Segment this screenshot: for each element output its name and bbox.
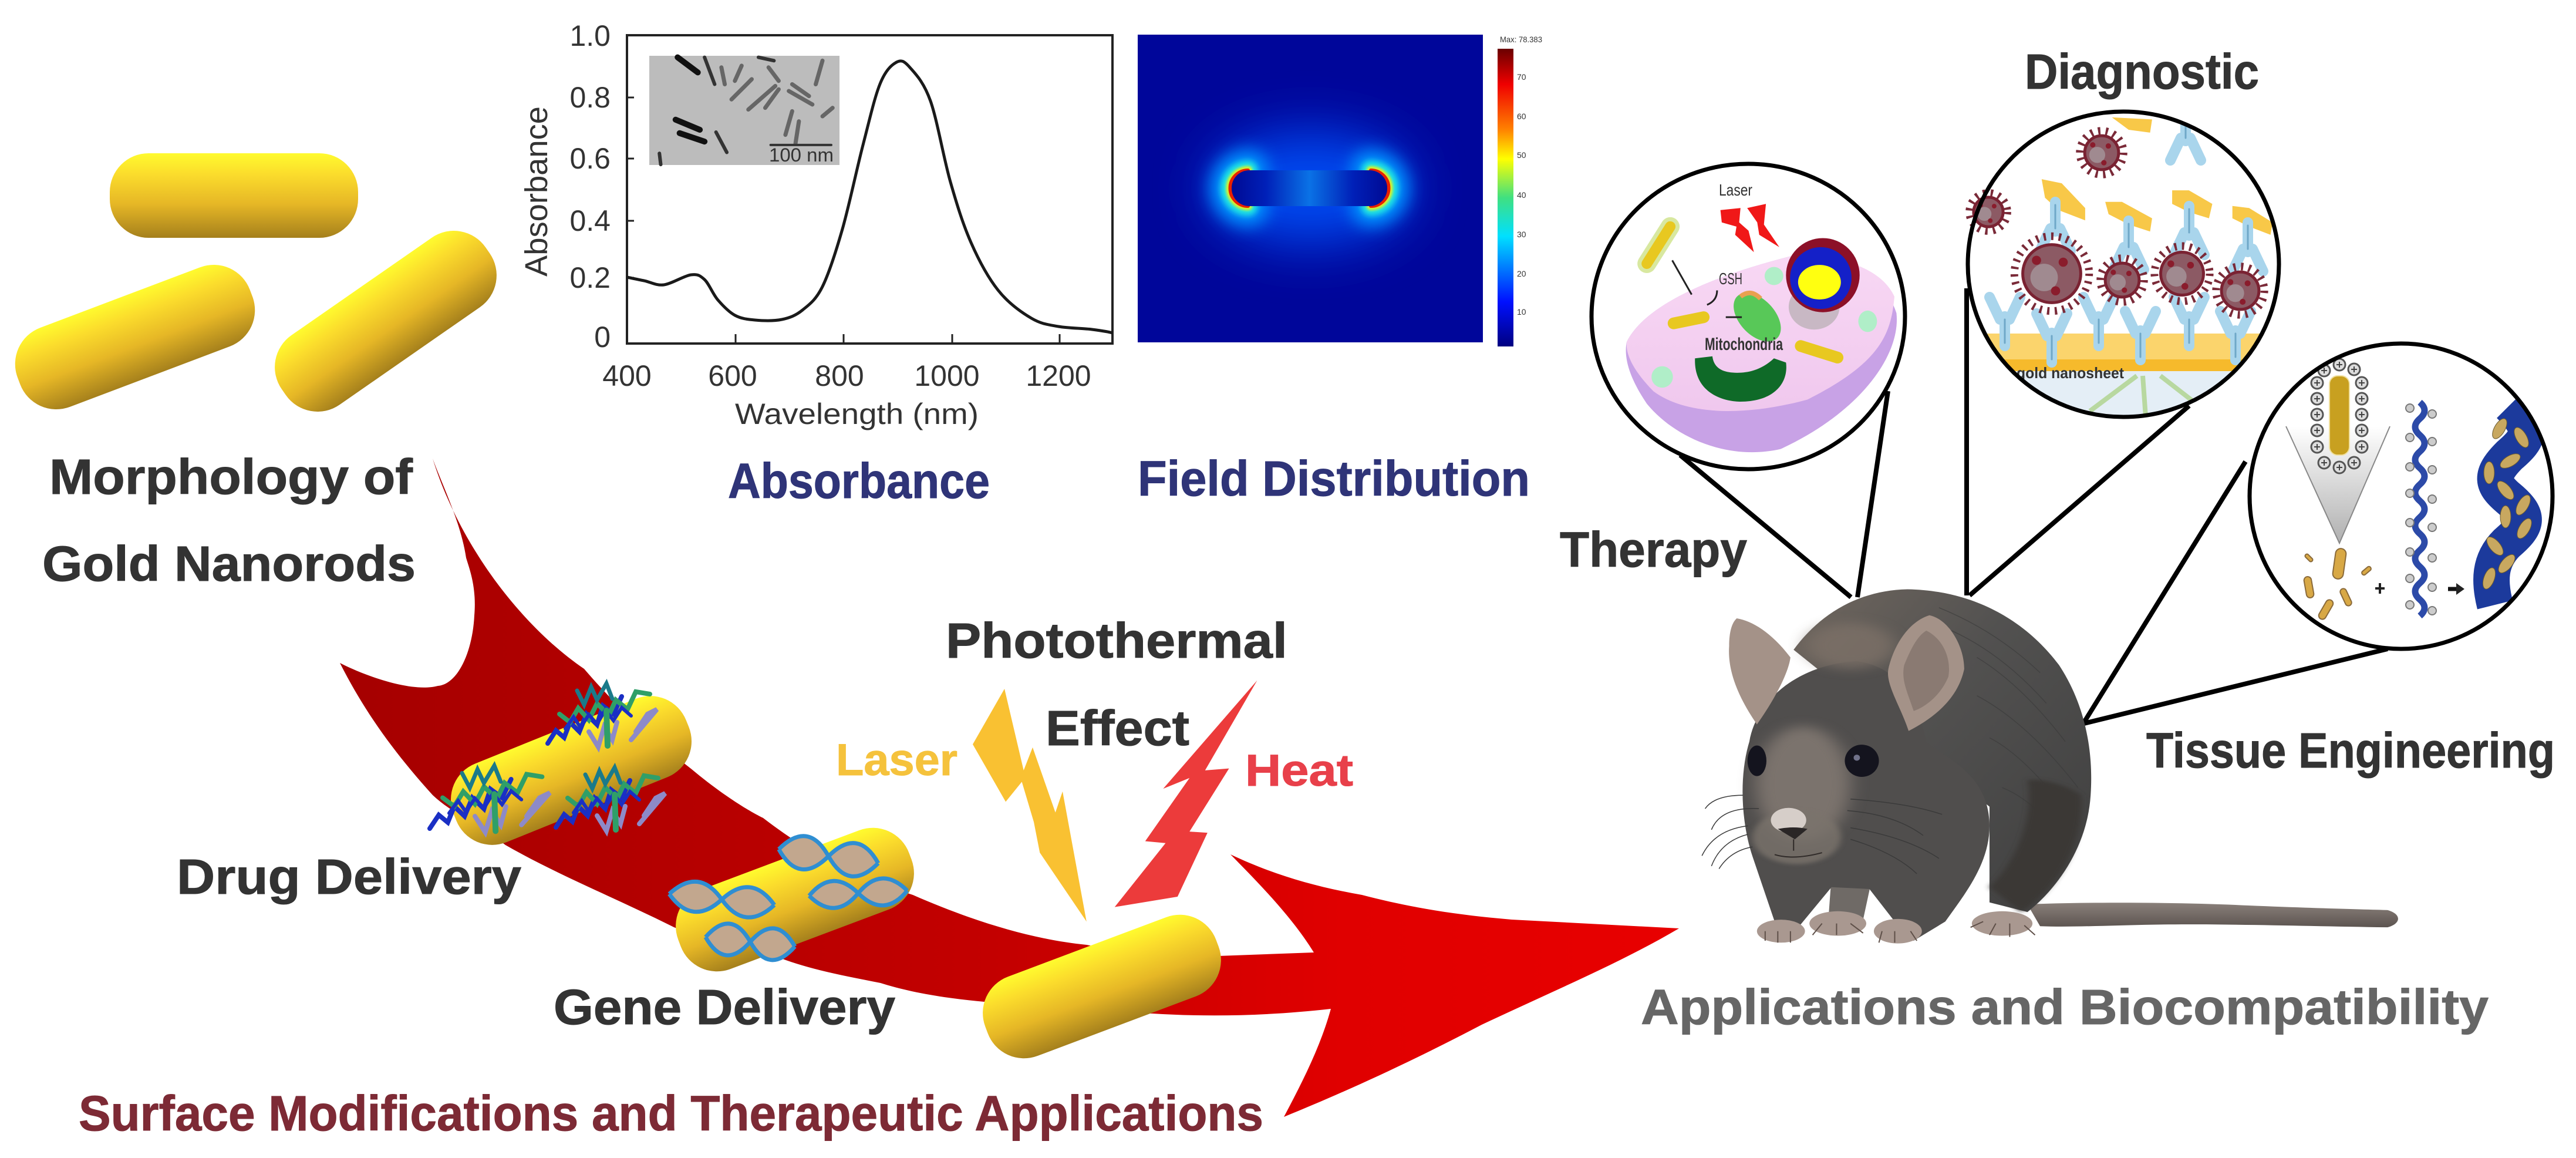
whiskers [1702, 795, 1942, 874]
outside virus [1970, 193, 2007, 231]
field colour bar: 10 [1517, 307, 1526, 317]
snout and nose [1752, 808, 1841, 864]
field colour bar: 30 [1517, 230, 1526, 239]
gold bars [2042, 117, 2272, 235]
polymer chain [2406, 402, 2436, 616]
gold nanosheet band: gold nanosheet [2017, 364, 2124, 382]
x axis numbers: 400 [602, 359, 652, 392]
plain gold nanorod [972, 904, 1232, 1069]
label: diagnostic: Diagnostic [2025, 44, 2259, 99]
laser bolts [1721, 204, 1779, 252]
x axis numbers: 800 [815, 359, 864, 392]
face highlight [1756, 726, 1850, 841]
antibodies [1990, 112, 2263, 362]
head and chest [1742, 661, 1990, 941]
drug delivery nanorod with proteins [430, 684, 703, 857]
field colour bar: Max: 78.383 [1500, 35, 1542, 44]
field distribution map [1138, 35, 1483, 342]
nucleus [1786, 238, 1860, 329]
gold nanorods group [4, 153, 512, 427]
gold nanosheet band [1987, 334, 2260, 415]
label: applications and biocompatibility: Applications and Biocompatibility [1641, 979, 2489, 1035]
small nanorods [2304, 548, 2372, 621]
label: laser: Laser [836, 735, 957, 785]
label: therapy: Therapy [1560, 522, 1747, 577]
therapy inner labels: Laser [1719, 181, 1752, 199]
therapy inner labels [1705, 181, 1783, 354]
heading: field distribution: Field Distribution [1138, 451, 1530, 506]
heading: morphology of gold nanorods [42, 449, 416, 591]
plus and arrow symbols [2375, 583, 2464, 595]
label: heat: Heat [1245, 746, 1353, 796]
hind leg shadow [1990, 780, 2082, 912]
left ear [1729, 618, 1791, 725]
y axis numbers: 0 [594, 321, 611, 354]
arrows [1673, 260, 1742, 317]
icon: laser bolt [973, 689, 1087, 921]
gene delivery nanorod with DNA [665, 817, 925, 982]
heading: morphology of gold nanorods: Morphology of [49, 449, 413, 504]
x axis numbers [602, 359, 1091, 392]
mouse illustration [1702, 589, 2398, 944]
outer field halo [1211, 132, 1410, 244]
label: photothermal effect: Effect [1046, 701, 1189, 756]
TEM inset [649, 56, 839, 166]
charged nanorod [2311, 359, 2368, 473]
cell [1626, 255, 1897, 452]
label: photothermal effect: Photothermal [946, 613, 1287, 668]
mitochondria [1695, 289, 1791, 402]
paws [1757, 911, 2035, 944]
magnification cone [2286, 426, 2390, 543]
small vesicles [1651, 267, 1877, 388]
label: surface modifications: Surface Modifications and Therapeutic Applications [79, 1086, 1263, 1141]
x axis title: Wavelength (nm) [735, 398, 979, 430]
y axis numbers [569, 19, 611, 354]
panel: tissue engineering circle [2250, 344, 2553, 649]
body [1793, 589, 2091, 912]
y axis title: Absorbance [519, 106, 554, 277]
field colour bar: 60 [1517, 112, 1526, 121]
x axis numbers: 600 [708, 359, 757, 392]
chart axes [627, 35, 1112, 344]
icon: heat bolt [1115, 681, 1257, 907]
field colour bar: 50 [1517, 150, 1526, 160]
panel: therapy circle [1592, 164, 1905, 469]
back leg [1828, 876, 1873, 920]
x axis numbers: 1200 [1026, 359, 1091, 392]
axis ticks [627, 97, 1060, 344]
label: photothermal effect [946, 613, 1287, 756]
hot spots at rod ends [1230, 170, 1389, 206]
panel: diagnostic circle [1967, 112, 2284, 424]
y axis numbers: 0.8 [569, 81, 611, 114]
composite helix [2480, 405, 2534, 605]
label: drug delivery: Drug Delivery [177, 849, 521, 904]
curved red arrow [340, 459, 1679, 1117]
y axis numbers: 0.2 [569, 261, 611, 294]
y axis numbers: 1.0 [569, 19, 611, 52]
label: gene delivery: Gene Delivery [554, 979, 895, 1035]
heading: absorbance: Absorbance [728, 453, 990, 509]
absorbance curve [627, 61, 1112, 333]
eyes [1748, 745, 1879, 777]
therapy inner labels: Mitochondria [1705, 335, 1783, 354]
right ear [1888, 615, 1964, 731]
y axis numbers: 0.6 [569, 142, 611, 175]
cell nanorods [1647, 227, 1837, 358]
field colour bar: 70 [1517, 72, 1526, 82]
rod interior [1232, 170, 1387, 206]
tail [2028, 903, 2398, 927]
y axis numbers: 0.4 [569, 204, 611, 237]
viruses [2014, 131, 2264, 315]
therapy inner labels: GSH [1719, 270, 1742, 288]
field colour bar [1498, 35, 1542, 346]
TEM inset: 100 nm [769, 144, 834, 166]
heading: morphology of gold nanorods: Gold Nanorods [42, 536, 416, 591]
field colour bar: 20 [1517, 269, 1526, 278]
fur lines [1939, 608, 2078, 849]
field colour bar: 40 [1517, 190, 1526, 200]
zoom lines to mouse [1680, 288, 2388, 723]
absorbance chart [519, 19, 1112, 430]
x axis numbers: 1000 [914, 359, 980, 392]
